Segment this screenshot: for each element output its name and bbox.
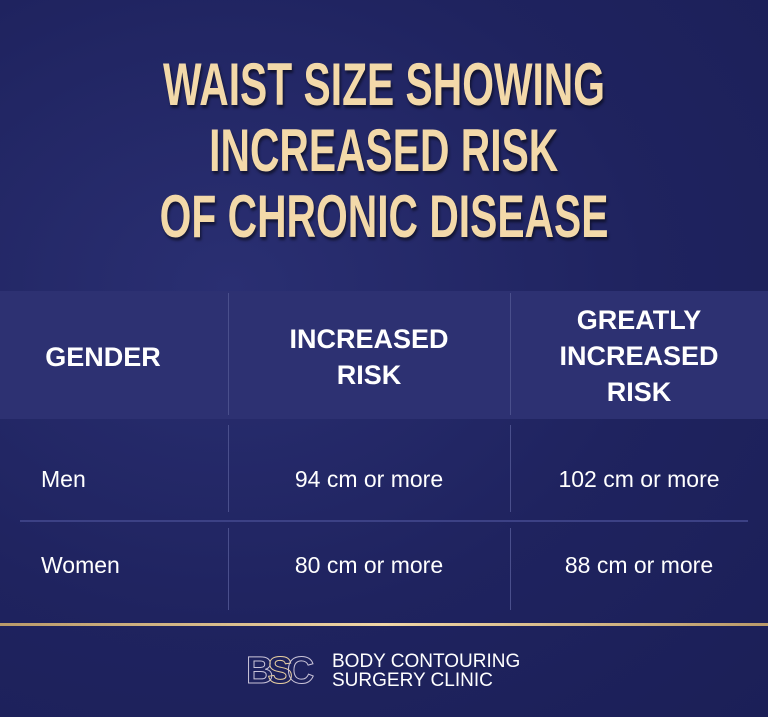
header row bbox=[0, 291, 768, 419]
table: 102 cm or more bbox=[558, 466, 720, 492]
row: women: Women bbox=[41, 552, 120, 578]
table: INCREASED bbox=[289, 324, 449, 354]
row: men: Men bbox=[41, 466, 86, 492]
title: WAIST SIZE SHOWING bbox=[163, 51, 605, 118]
title: OF CHRONIC DISEASE bbox=[160, 183, 608, 250]
table: 80 cm or more bbox=[295, 552, 443, 578]
table bbox=[0, 291, 768, 610]
title: INCREASED RISK bbox=[209, 117, 559, 184]
table: GENDER bbox=[45, 342, 161, 372]
table: RISK bbox=[607, 377, 671, 407]
table: 88 cm or more bbox=[565, 552, 713, 578]
title bbox=[160, 51, 610, 250]
table: INCREASED bbox=[559, 341, 719, 371]
logo bbox=[248, 651, 520, 691]
brand name: SURGERY CLINIC bbox=[332, 670, 493, 691]
brand name bbox=[332, 651, 520, 691]
table: GREATLY bbox=[577, 305, 701, 335]
gold divider bbox=[0, 623, 768, 626]
table: RISK bbox=[337, 360, 401, 390]
brand name: BODY CONTOURING bbox=[332, 651, 520, 672]
table: 94 cm or more bbox=[295, 466, 443, 492]
